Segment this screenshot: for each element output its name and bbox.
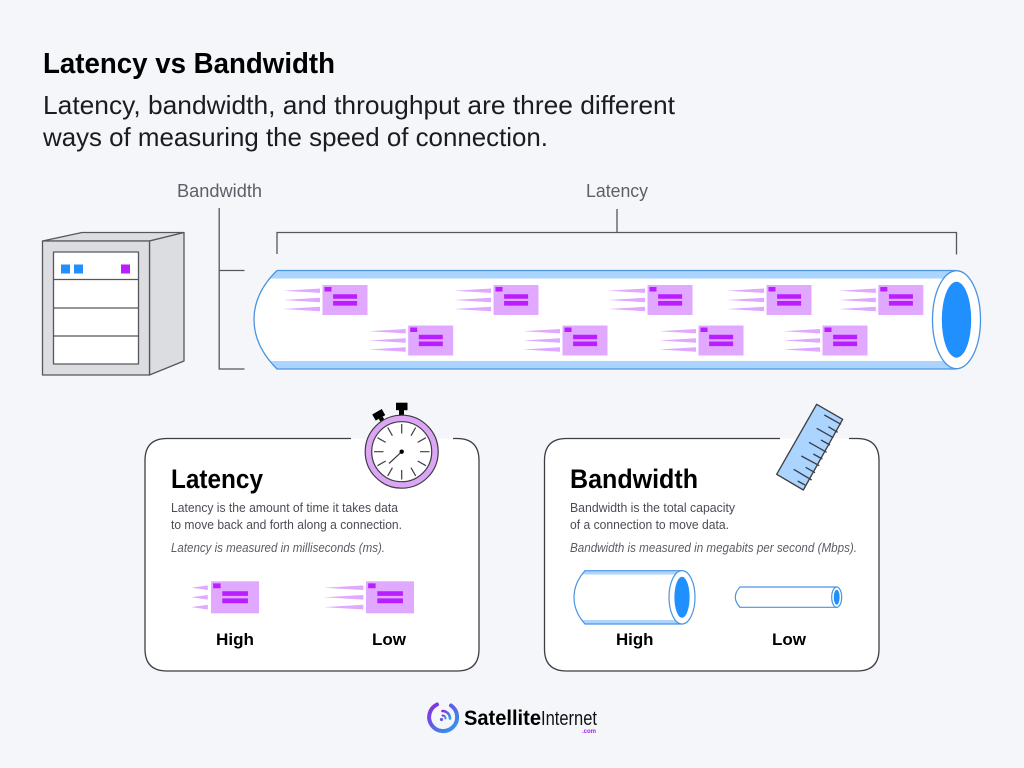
label: high latency: High <box>216 630 254 649</box>
label: bandwidth dimension <box>177 181 262 369</box>
label: low latency: Low <box>372 630 407 649</box>
logo: SatelliteInternet: Internet <box>541 708 597 730</box>
latency description: Latency is the amount of time it takes data <box>171 501 398 515</box>
heading: bandwidth: Bandwidth <box>570 464 698 494</box>
packet 3 <box>608 285 692 315</box>
icon: ruler <box>777 404 843 490</box>
bandwidth description: Bandwidth is the total capacity <box>570 501 736 515</box>
subtitle: ways of measuring the speed of connection. <box>42 122 548 152</box>
bandwidth unit note: Bandwidth is measured in megabits per second (Mbps). <box>570 541 857 555</box>
packet 1 <box>283 285 368 315</box>
icon: low bandwidth pipe <box>735 587 842 607</box>
icon: server <box>42 232 184 375</box>
icon: stopwatch <box>365 403 438 488</box>
packet 7 <box>523 326 608 356</box>
latency unit note: Latency is measured in milliseconds (ms). <box>171 541 385 555</box>
packet 8 <box>659 326 744 356</box>
icon: high bandwidth pipe <box>574 571 695 624</box>
logo: SatelliteInternet: .com <box>582 728 596 735</box>
bandwidth description <box>570 501 736 532</box>
label: bandwidth dimension: Bandwidth <box>177 181 262 201</box>
latency description <box>171 501 402 532</box>
bandwidth description: of a connection to move data. <box>570 518 729 532</box>
packet 4 <box>727 285 812 315</box>
subtitle: Latency, bandwidth, and throughput are three different <box>43 90 676 120</box>
label: latency dimension <box>277 181 956 254</box>
latency description: to move back and forth along a connection. <box>171 518 402 532</box>
packet 5 <box>839 285 923 315</box>
icon: low latency packet <box>324 581 414 613</box>
envelope packets in pipe <box>283 285 923 356</box>
packet 2 <box>454 285 538 315</box>
subtitle <box>42 90 676 152</box>
logo wordmark: Satellite <box>464 707 541 730</box>
label: low bandwidth: Low <box>772 630 807 649</box>
packet 6 <box>369 326 453 356</box>
large pipe <box>254 270 980 369</box>
heading: latency: Latency <box>171 464 263 494</box>
packet 9 <box>783 326 868 356</box>
logo: SatelliteInternet <box>429 704 597 735</box>
panel: latency <box>145 438 479 671</box>
label: high bandwidth: High <box>616 630 654 649</box>
title: Latency vs Bandwidth <box>43 48 335 80</box>
logo mark <box>429 704 457 731</box>
panel: bandwidth <box>544 438 879 671</box>
icon: high latency packet <box>191 581 259 613</box>
label: latency dimension: Latency <box>586 181 648 201</box>
